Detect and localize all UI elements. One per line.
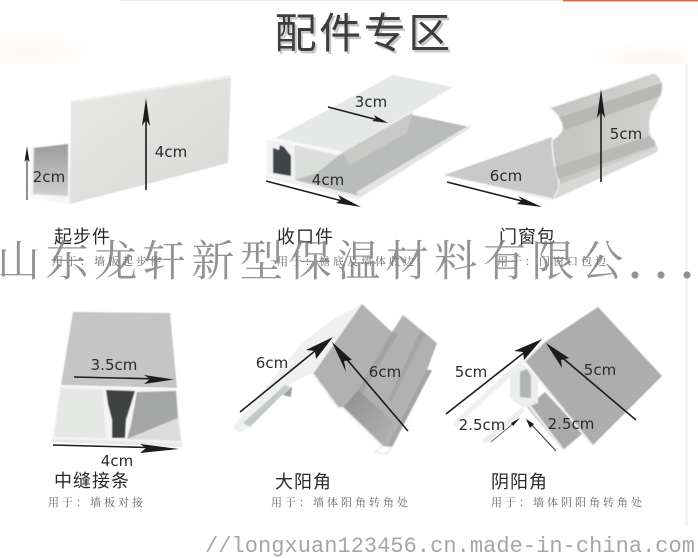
dimension: 2cm: 2cm bbox=[33, 168, 65, 186]
dimension: 6cm: 6cm bbox=[490, 167, 522, 185]
arrow: 5cm left bbox=[446, 339, 542, 414]
dimension: 2.5cm left: 2.5cm bbox=[459, 416, 505, 434]
usage: 用于：门窗口包边 bbox=[497, 254, 609, 268]
arrow: 2.5cm right bbox=[526, 419, 556, 451]
arrow: 6cm bbox=[447, 182, 542, 207]
name: 中缝接条 bbox=[54, 471, 130, 491]
arrow: 4cm bbox=[142, 98, 150, 190]
panel: inner and outer corner 阴阳角 bbox=[446, 307, 662, 509]
usage: 用于：墙体阳角转角处 bbox=[271, 495, 411, 509]
panel: door and window trim 门窗包 bbox=[444, 73, 664, 268]
panel: large outer corner 大阳角 bbox=[233, 304, 437, 509]
product: U channel bbox=[30, 75, 231, 205]
dimension: 2.5cm right: 2.5cm bbox=[548, 415, 594, 433]
arrow: 6cm left bbox=[240, 337, 333, 412]
arrow: 5cm bbox=[597, 89, 605, 182]
panel: middle seam strip 中缝接条 bbox=[48, 312, 182, 509]
dimension: 5cm left: 5cm bbox=[455, 363, 487, 381]
usage: 用于：檐底及墙体收边 bbox=[277, 254, 417, 268]
title: 配件专区 bbox=[276, 12, 455, 60]
dimension: 6cm right: 6cm bbox=[369, 363, 401, 381]
dimension: 4cm: 4cm bbox=[155, 143, 187, 161]
arrow: 4cm bbox=[266, 181, 361, 207]
arrow: 3.5cm bbox=[74, 375, 174, 384]
dimension: 4cm: 4cm bbox=[101, 452, 133, 470]
arrow: 2cm bbox=[24, 146, 30, 200]
name: 门窗包 bbox=[499, 227, 556, 247]
arrow: 2.5cm left bbox=[491, 418, 520, 442]
panel: starter piece 起步件 bbox=[24, 75, 231, 268]
usage: 用于：墙板起步件 bbox=[52, 254, 164, 268]
usage: 用于：墙板对接 bbox=[48, 495, 146, 509]
product: trim profile bbox=[444, 73, 664, 202]
title: 配件专区 bbox=[274, 10, 453, 57]
usage: 用于：墙体阴阳角转角处 bbox=[491, 495, 645, 509]
arrow: 6cm right bbox=[332, 342, 408, 431]
dimension: 3.5cm: 3.5cm bbox=[91, 356, 137, 374]
name: 起步件 bbox=[54, 227, 111, 247]
product: closing profile bbox=[265, 75, 470, 199]
panel: closing piece 收口件 bbox=[265, 75, 470, 268]
product: inner-outer corner profile bbox=[452, 307, 662, 452]
arrow: 5cm right bbox=[546, 343, 636, 420]
dimension: 5cm: 5cm bbox=[610, 125, 642, 143]
product: seam strip bbox=[52, 312, 182, 447]
name: 大阳角 bbox=[275, 472, 332, 492]
arrow: 3cm bbox=[328, 107, 388, 123]
dimension: 6cm left: 6cm bbox=[256, 354, 288, 372]
dimension: 3cm: 3cm bbox=[355, 93, 387, 111]
dimension: 5cm right: 5cm bbox=[584, 361, 616, 379]
dimension: 4cm: 4cm bbox=[312, 171, 344, 189]
product: outer corner profile bbox=[233, 304, 437, 454]
name: 收口件 bbox=[277, 227, 334, 247]
watermark: company name: 山东龙轩新型保温材料有限公 bbox=[0, 228, 629, 289]
name: 阴阳角 bbox=[491, 472, 548, 492]
arrow: 4cm bbox=[53, 444, 179, 453]
